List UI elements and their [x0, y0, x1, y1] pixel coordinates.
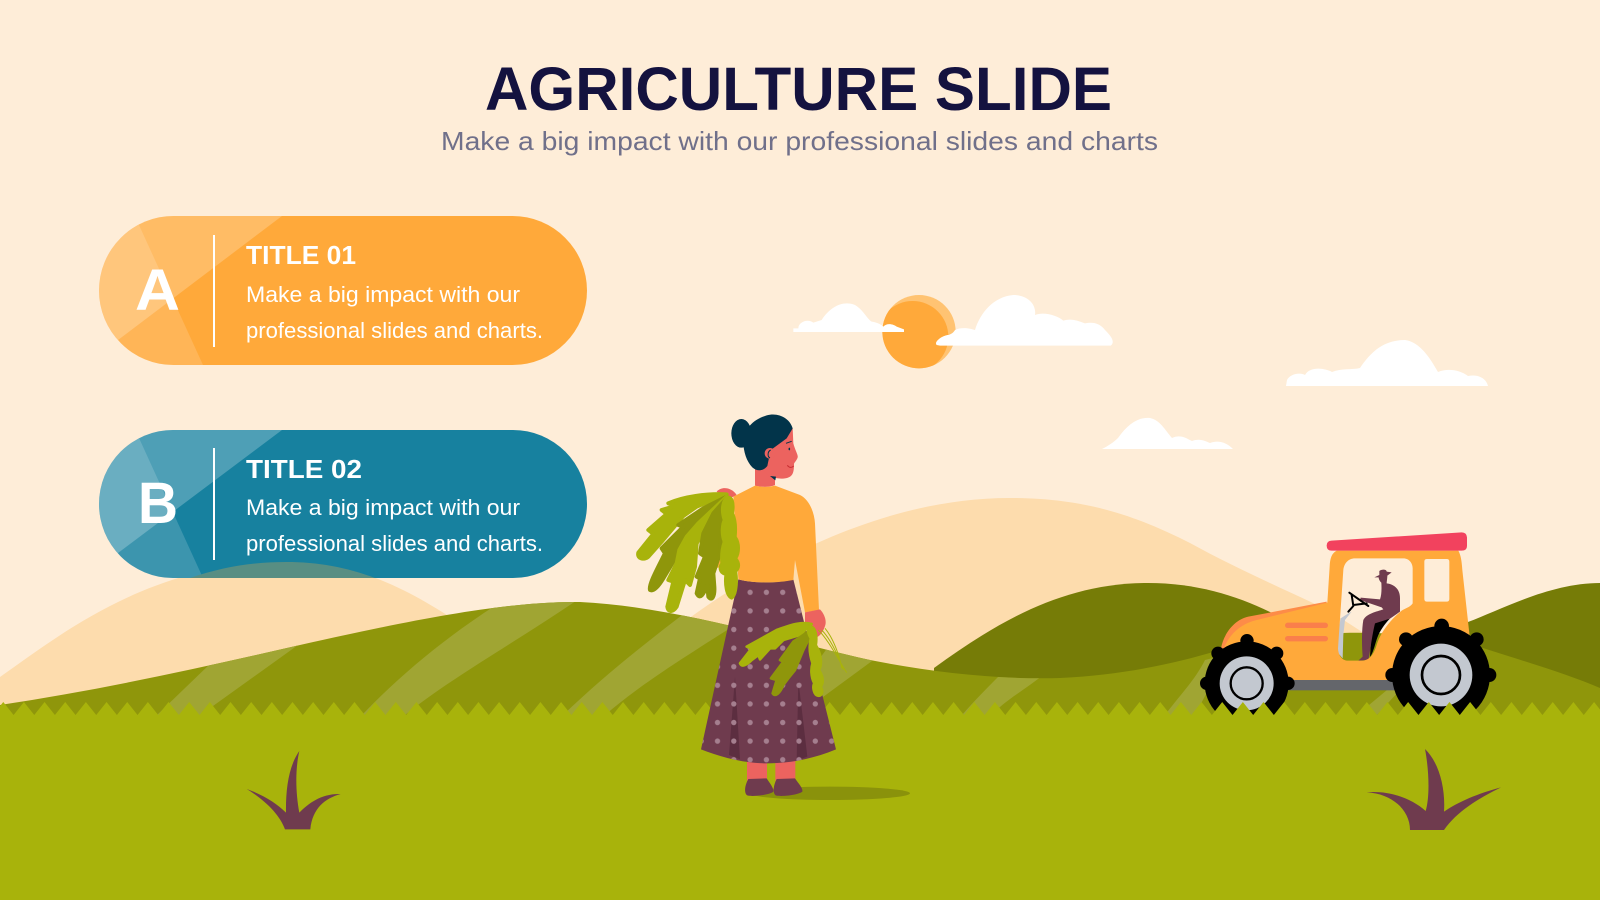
- hood highlight: [1221, 602, 1327, 648]
- ground shadow: [750, 787, 910, 800]
- hill: left peach: [0, 562, 470, 720]
- tractor seat: [1370, 619, 1390, 657]
- hill: green foreground: [0, 602, 1600, 730]
- steering column: [1338, 612, 1352, 658]
- hand and sleeve behind leaves: [714, 488, 737, 568]
- grass field: [0, 702, 1600, 900]
- title: AGRICULTURE SLIDE: [485, 55, 1112, 123]
- panel: title 01 pill: [90, 216, 587, 365]
- front wheel: [1200, 634, 1295, 725]
- woman farmer: [638, 414, 910, 800]
- heading: title 01: TITLE 01: [246, 240, 356, 270]
- icon: cloud left of sun: [793, 303, 904, 332]
- icon: cloud right of sun: [936, 295, 1113, 346]
- icon: sun: [882, 295, 956, 368]
- icon: small cloud: [1102, 418, 1233, 449]
- pill background orange: [99, 216, 587, 365]
- text block: title 01 body: professional slides and charts.: [246, 318, 543, 343]
- steering wheel: [1348, 593, 1368, 612]
- text block: title 02 body: Make a big impact with our: [246, 495, 520, 520]
- right hand: [805, 609, 826, 637]
- badge letter A: A: [135, 258, 180, 323]
- lower bouquet leaves: [740, 623, 824, 697]
- pill background teal: [99, 430, 587, 578]
- panel: title 02 pill: [90, 430, 587, 580]
- skirt with dots: [697, 577, 840, 767]
- background hills: [0, 498, 1600, 730]
- tractor axle: [1287, 680, 1397, 690]
- text block: title 01 body: Make a big impact with our: [246, 282, 520, 307]
- subtitle: Make a big impact with our professional slides and charts: [441, 126, 1158, 156]
- tractor: [1200, 532, 1496, 725]
- tractor body with windows: [1223, 551, 1469, 680]
- icon: plant right: [1367, 749, 1501, 830]
- hill: centre peach: [680, 498, 1375, 720]
- neck: [755, 467, 775, 487]
- legs: [747, 760, 795, 781]
- shoes: [745, 778, 802, 796]
- text block: title 02 body: professional slides and charts.: [246, 531, 543, 556]
- upper bouquet leaves: [638, 494, 739, 611]
- hood vents: [1285, 623, 1328, 641]
- driver silhouette: [1358, 570, 1400, 661]
- sun and clouds: [793, 295, 1113, 372]
- icon: plant left: [247, 751, 341, 829]
- rear wheel: [1385, 619, 1496, 724]
- pill facet highlights: [90, 430, 380, 580]
- hill: dark olive right: [1440, 583, 1600, 720]
- pill facet highlights: [90, 216, 282, 365]
- badge letter B: B: [138, 471, 178, 536]
- sweater: [733, 486, 819, 612]
- tractor roof: [1327, 532, 1467, 551]
- icon: cloud upper right: [1286, 340, 1488, 386]
- field stripes: [157, 590, 1400, 715]
- hill: dark olive middle: [934, 583, 1340, 720]
- heading: title 02: TITLE 02: [246, 454, 362, 484]
- lower bouquet stems: [818, 628, 847, 673]
- head: [731, 414, 798, 480]
